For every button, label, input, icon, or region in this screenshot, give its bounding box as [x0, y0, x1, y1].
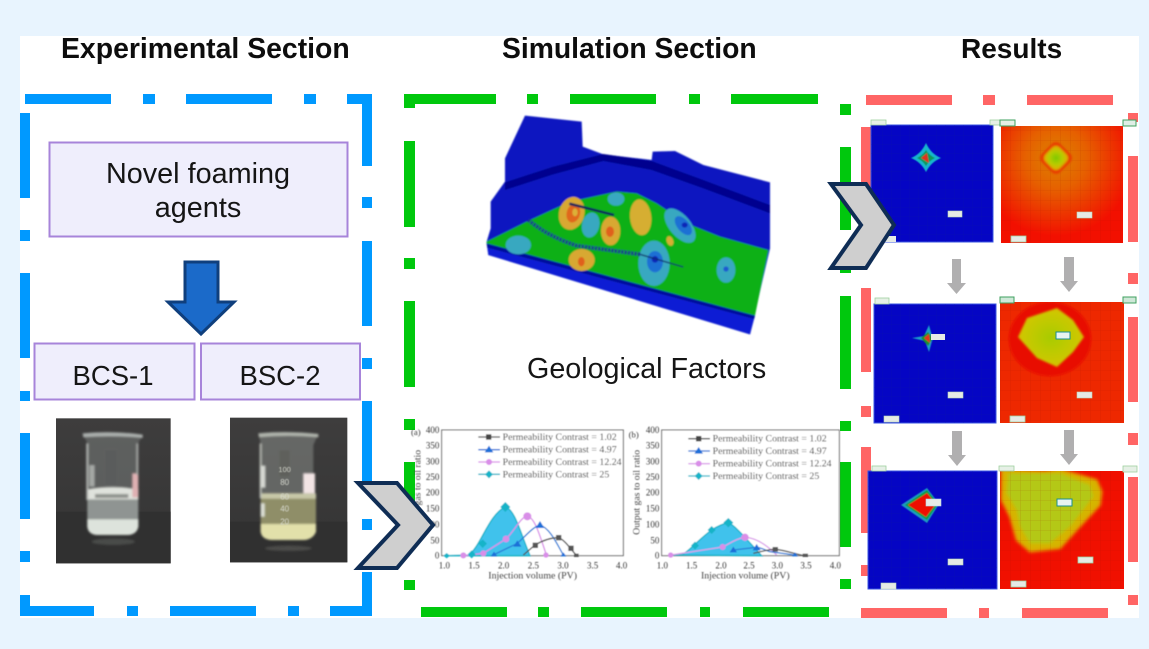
photo: BSC-2 beaker: 40 — [280, 505, 290, 514]
chart (a): gas to oil ratio vs injection volume: 50 — [430, 535, 440, 545]
box: BSC-2: BSC-2 — [240, 360, 320, 391]
chart (a): gas to oil ratio vs injection volume: 100 — [426, 519, 440, 529]
photo: BCS-1 beaker — [56, 418, 171, 563]
chart (b): gas to oil ratio vs injection volume: Output gas to oil ratio — [631, 450, 642, 535]
box: BCS-1: BCS-1 — [72, 360, 154, 391]
chart (b): gas to oil ratio vs injection volume: 100 — [646, 519, 660, 529]
heading: Experimental Section: Experimental Section — [61, 33, 350, 65]
chart (b): gas to oil ratio vs injection volume: 200 — [646, 488, 660, 498]
box: novel foaming agents — [50, 142, 348, 236]
chart (b): gas to oil ratio vs injection volume: 3.0 — [772, 560, 783, 570]
legend (a): Permeability Contrast = 4.97 — [503, 445, 617, 456]
chart (b): gas to oil ratio vs injection volume: 2.0 — [715, 560, 727, 570]
wells — [569, 204, 614, 215]
box: BSC-2 — [201, 344, 360, 400]
panel frame: simulation section dashed border — [404, 94, 851, 617]
chart (b): gas to oil ratio vs injection volume: 300 — [646, 456, 660, 466]
legend (b): Permeability Contrast = 12.24 — [713, 459, 832, 470]
chart (a): gas to oil ratio vs injection volume: 2.0 — [498, 560, 510, 570]
chart (a): gas to oil ratio vs injection volume: 2.5 — [528, 560, 539, 570]
3D geological model — [487, 116, 770, 334]
photo: BSC-2 beaker: 100 — [279, 465, 291, 474]
simulation blobs — [506, 236, 531, 254]
chart (b): gas to oil ratio vs injection volume: 250 — [646, 472, 660, 482]
chart (a): gas to oil ratio vs injection volume: 400 — [426, 425, 440, 435]
chart (b): gas to oil ratio vs injection volume: 1.5 — [686, 560, 698, 570]
arrow: row 2 to row 3, left — [948, 431, 966, 466]
chart (a): gas to oil ratio vs injection volume: 0 — [435, 551, 440, 561]
chart (a): gas to oil ratio vs injection volume: Injection volume (PV) — [488, 570, 577, 581]
photo: BSC-2 beaker: 20 — [280, 517, 290, 526]
photo: BSC-2 beaker: 80 — [280, 478, 290, 487]
legend (b) — [688, 434, 832, 482]
chart (a): gas to oil ratio vs injection volume: 200 — [426, 488, 440, 498]
chart (a): gas to oil ratio vs injection volume: 150 — [426, 504, 440, 514]
chart (a): gas to oil ratio vs injection volume: 300 — [426, 456, 440, 466]
panel frame: experimental section dashed border — [20, 94, 372, 616]
chart (a): gas to oil ratio vs injection volume: 4.0 — [616, 560, 628, 570]
heading: Simulation Section: Simulation Section — [502, 32, 757, 64]
chart (b): gas to oil ratio vs injection volume: 0 — [655, 551, 660, 561]
chart (b): gas to oil ratio vs injection volume: 2.5 — [743, 560, 755, 570]
heat map: row 2 left — [874, 298, 996, 423]
legend (b): Permeability Contrast = 25 — [713, 471, 819, 482]
chart (b): gas to oil ratio vs injection volume: 350 — [646, 441, 660, 451]
legend (a): Permeability Contrast = 12.24 — [503, 457, 622, 468]
arrow: row 1 to row 2, left — [947, 259, 966, 294]
chart (a): gas to oil ratio vs injection volume: 350 — [426, 441, 440, 451]
chart (b): gas to oil ratio vs injection volume: 50 — [650, 535, 660, 545]
chart (b): gas to oil ratio vs injection volume — [629, 425, 841, 581]
chart (a): gas to oil ratio vs injection volume: 3.5 — [587, 560, 599, 570]
chart (b): gas to oil ratio vs injection volume: (b) — [629, 430, 639, 440]
photo: BSC-2 beaker — [230, 418, 347, 562]
chart (b): gas to oil ratio vs injection volume: 150 — [646, 504, 660, 514]
chart (a): gas to oil ratio vs injection volume — [411, 425, 628, 581]
arrow: row 2 to row 3, right — [1060, 430, 1078, 465]
legend (a): Permeability Contrast = 25 — [503, 469, 609, 480]
panel frame: results section dashed border — [861, 95, 1138, 618]
caption: Geological Factors: Geological Factors — [527, 353, 766, 385]
chart (a): gas to oil ratio vs injection volume: 250 — [426, 472, 440, 482]
legend (b): Permeability Contrast = 1.02 — [713, 434, 827, 445]
box: novel foaming agents: agents — [155, 192, 241, 224]
chart (b): gas to oil ratio vs injection volume: 3.5 — [800, 560, 812, 570]
arrow: foaming agents to samples — [168, 262, 234, 334]
box: novel foaming agents: Novel foaming — [106, 158, 290, 190]
chart (a): gas to oil ratio vs injection volume: 3.0 — [557, 560, 569, 570]
heat map: row 3 right — [999, 466, 1137, 589]
chevron arrow: simulation to results — [831, 184, 894, 268]
chevron arrow: experimental to simulation — [358, 483, 433, 568]
heat map: row 3 left — [868, 466, 997, 589]
chart (a): gas to oil ratio vs injection volume: 1.0 — [439, 560, 450, 570]
legend (a) — [478, 432, 622, 480]
heat map: row 1 left — [871, 120, 1000, 242]
chart (a): gas to oil ratio vs injection volume: (a) — [411, 427, 421, 437]
box: BCS-1 — [34, 344, 194, 400]
heat map: row 2 right — [1000, 297, 1136, 423]
chart (a): gas to oil ratio vs injection volume: Output gas to oil ratio — [413, 450, 424, 535]
chart (b): gas to oil ratio vs injection volume: 400 — [646, 425, 660, 435]
legend (a): Permeability Contrast = 1.02 — [503, 432, 617, 443]
legend (b): Permeability Contrast = 4.97 — [713, 446, 827, 457]
chart (b): gas to oil ratio vs injection volume: 4.0 — [830, 560, 841, 570]
photo: BSC-2 beaker: 60 — [280, 492, 290, 501]
chart (b): gas to oil ratio vs injection volume: 1.0 — [657, 560, 668, 570]
chart (a): gas to oil ratio vs injection volume: 1.5 — [468, 560, 480, 570]
chart (b): gas to oil ratio vs injection volume: Injection volume (PV) — [701, 570, 790, 581]
arrow: row 1 to row 2, right — [1060, 257, 1078, 292]
heat map: row 1 right — [1000, 120, 1136, 243]
heading: Results: Results — [961, 33, 1062, 64]
